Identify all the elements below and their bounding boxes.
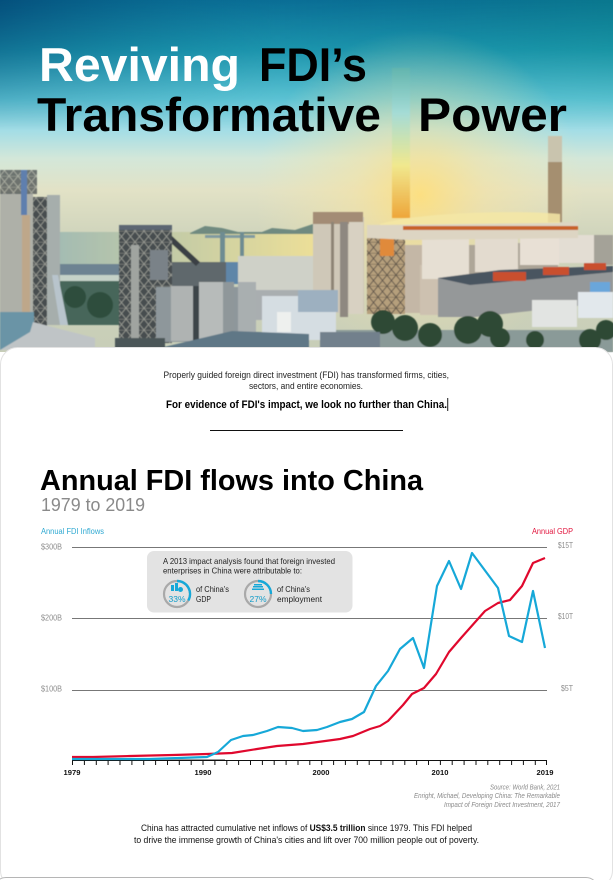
intro text: Properly guided foreign direct investment (FDI) has transformed firms, cities, [164, 369, 449, 380]
source notes [414, 782, 561, 809]
left axis labels [41, 542, 62, 694]
x axis year labels: 2019 [537, 768, 553, 777]
callout: 2013 impact analysis: employment [277, 595, 323, 604]
divider rule [210, 430, 403, 431]
intro text: sectors, and entire economies. [249, 380, 363, 391]
power plant scaffold [367, 238, 405, 314]
x axis with ticks [72, 760, 547, 765]
intro text: For evidence of FDI's impact, we look no further than China. [166, 399, 447, 411]
gauge: 27% of employment: 27% [249, 594, 267, 604]
left axis labels: $200B [41, 614, 62, 622]
source notes: Impact of Foreign Direct Investment, 2017 [444, 800, 561, 809]
summary text: China has attracted cumulative net inflows of US$3.5 trillion since 1979. This FDI helped [141, 822, 472, 833]
title: Reviving [39, 38, 240, 91]
power plant blocks [405, 245, 438, 313]
title: Power [418, 88, 567, 141]
x axis year labels: 1979 [64, 768, 80, 777]
gantry structure [119, 227, 172, 343]
title: FDI’s [259, 38, 367, 91]
summary text: to drive the immense growth of China's cities and lift over 700 million people out of poverty. [134, 834, 479, 845]
central tower [313, 217, 364, 313]
title [37, 38, 567, 141]
GDP line [72, 558, 545, 757]
gauge: 33% of GDP: 33% [168, 594, 186, 604]
x axis year labels: 2000 [313, 768, 329, 777]
callout: 2013 impact analysis: of China's [277, 585, 310, 594]
x axis year labels [64, 768, 553, 777]
callout: 2013 impact analysis [147, 551, 352, 612]
left tower [0, 193, 33, 328]
chart subtitle: 1979 to 2019 [41, 494, 145, 515]
x axis year labels: 2010 [432, 768, 448, 777]
source notes: Enright, Michael, Developing China: The Remarkable [414, 791, 560, 800]
callout: 2013 impact analysis: GDP [196, 595, 211, 604]
callout: 2013 impact analysis: A 2013 impact analysis found that foreign invested [163, 556, 335, 566]
lower centre buildings [262, 296, 336, 340]
chart heading: Annual FDI flows into China [40, 465, 424, 497]
right axis labels: $10T [558, 612, 573, 621]
title: Transformative [37, 88, 381, 141]
FDI line [72, 553, 545, 759]
distant cranes and sheds [205, 235, 255, 238]
legend: Annual GDP: Annual GDP [532, 527, 573, 536]
trees and yard [336, 330, 613, 352]
legend: Annual FDI Inflows: Annual FDI Inflows [41, 527, 104, 536]
right axis labels: $5T [561, 684, 573, 693]
right axis labels: $15T [558, 541, 573, 550]
gauge: 33% of GDP [164, 581, 190, 607]
white content panel [0, 348, 612, 880]
callout: 2013 impact analysis: enterprises in China were attributable to: [163, 566, 302, 576]
hero photo: industrial skyline at sunset [0, 0, 613, 352]
power plant roof [367, 222, 578, 240]
chimneys [392, 68, 410, 218]
left axis labels: $100B [41, 684, 62, 694]
right axis labels [558, 541, 573, 693]
intro text [164, 369, 449, 411]
source notes: Source: World Bank, 2021 [490, 782, 560, 792]
gauge: 27% of employment [245, 581, 271, 607]
left axis labels: $300B [41, 542, 62, 552]
callout: 2013 impact analysis: of China's [196, 585, 229, 594]
summary text [134, 822, 479, 845]
x axis year labels: 1990 [195, 768, 211, 777]
line chart: FDI inflows and GDP [41, 527, 573, 777]
silos [156, 287, 256, 342]
next panel top edge [0, 878, 598, 880]
